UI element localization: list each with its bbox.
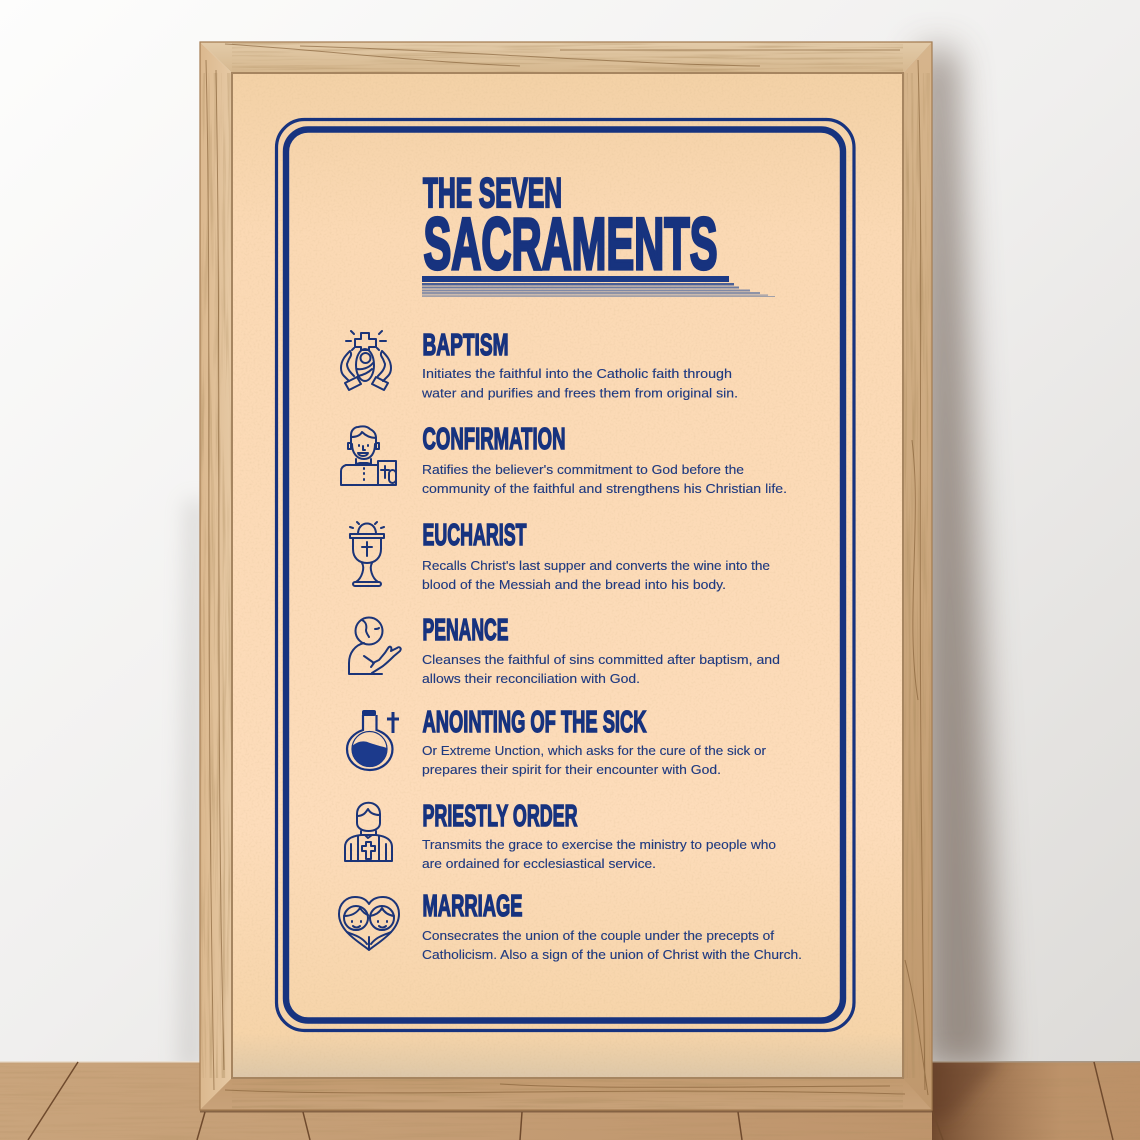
sacrament: eucharist <box>350 517 770 592</box>
description: Initiates the faithful into the Catholic faith through <box>422 367 732 381</box>
inner border <box>286 130 843 1020</box>
description: Consecrates the union of the couple under the precepts of <box>422 929 775 943</box>
outer border <box>276 120 854 1030</box>
description: prepares their spirit for their encounter with God. <box>422 763 721 777</box>
icon: chalice with host and cross <box>350 522 384 586</box>
heading: PENANCE <box>422 612 508 647</box>
heading: PRIESTLY ORDER <box>422 798 578 833</box>
description: community of the faithful and strengthens his Christian life. <box>422 482 787 496</box>
sacrament: penance <box>349 612 780 686</box>
heading: BAPTISM <box>422 327 508 362</box>
description <box>422 744 766 777</box>
sacrament: priestly order <box>345 798 776 871</box>
description: Catholicism. Also a sign of the union of Christ with the Church. <box>422 948 802 962</box>
heading: ANOINTING OF THE SICK <box>422 704 647 739</box>
heading: CONFIRMATION <box>422 421 566 456</box>
icon: person with book and cross <box>341 426 396 485</box>
icon: praying person <box>349 618 401 674</box>
description <box>422 559 770 592</box>
icon: couple in heart <box>339 897 399 950</box>
description: Ratifies the believer's commitment to God before the <box>422 463 744 477</box>
sacrament: marriage <box>339 888 802 962</box>
description: are ordained for ecclesiastical service. <box>422 857 656 871</box>
icon: priest with cross <box>345 803 392 861</box>
description: allows their reconciliation with God. <box>422 672 640 686</box>
heading: EUCHARIST <box>422 517 527 552</box>
description: Cleanses the faithful of sins committed after baptism, and <box>422 653 780 667</box>
description: Recalls Christ's last supper and converts the wine into the <box>422 559 770 573</box>
title underline stripes <box>422 276 775 297</box>
sacrament: baptism <box>341 327 738 400</box>
description: Transmits the grace to exercise the ministry to people who <box>422 838 776 852</box>
description <box>421 367 738 400</box>
wooden floor <box>0 1055 1140 1140</box>
sacrament: confirmation <box>341 421 787 496</box>
description <box>422 838 776 871</box>
title: THE SEVEN <box>423 169 562 216</box>
description <box>422 653 780 686</box>
description: blood of the Messiah and the bread into his body. <box>422 578 726 592</box>
icon: oil flask with cross <box>347 710 399 770</box>
wooden picture frame <box>200 42 932 1110</box>
title <box>423 169 718 285</box>
title: SACRAMENTS <box>424 204 718 285</box>
description: water and purifies and frees them from original sin. <box>421 386 738 400</box>
description: Or Extreme Unction, which asks for the cure of the sick or <box>422 744 766 758</box>
aged paper poster <box>232 73 903 1078</box>
description <box>422 929 802 962</box>
icon: hands holding baby under cross <box>341 331 391 390</box>
sacrament: anointing of the sick <box>347 704 766 777</box>
wall shadows around frame <box>178 50 1000 1070</box>
heading: MARRIAGE <box>422 888 522 923</box>
description <box>422 463 787 496</box>
